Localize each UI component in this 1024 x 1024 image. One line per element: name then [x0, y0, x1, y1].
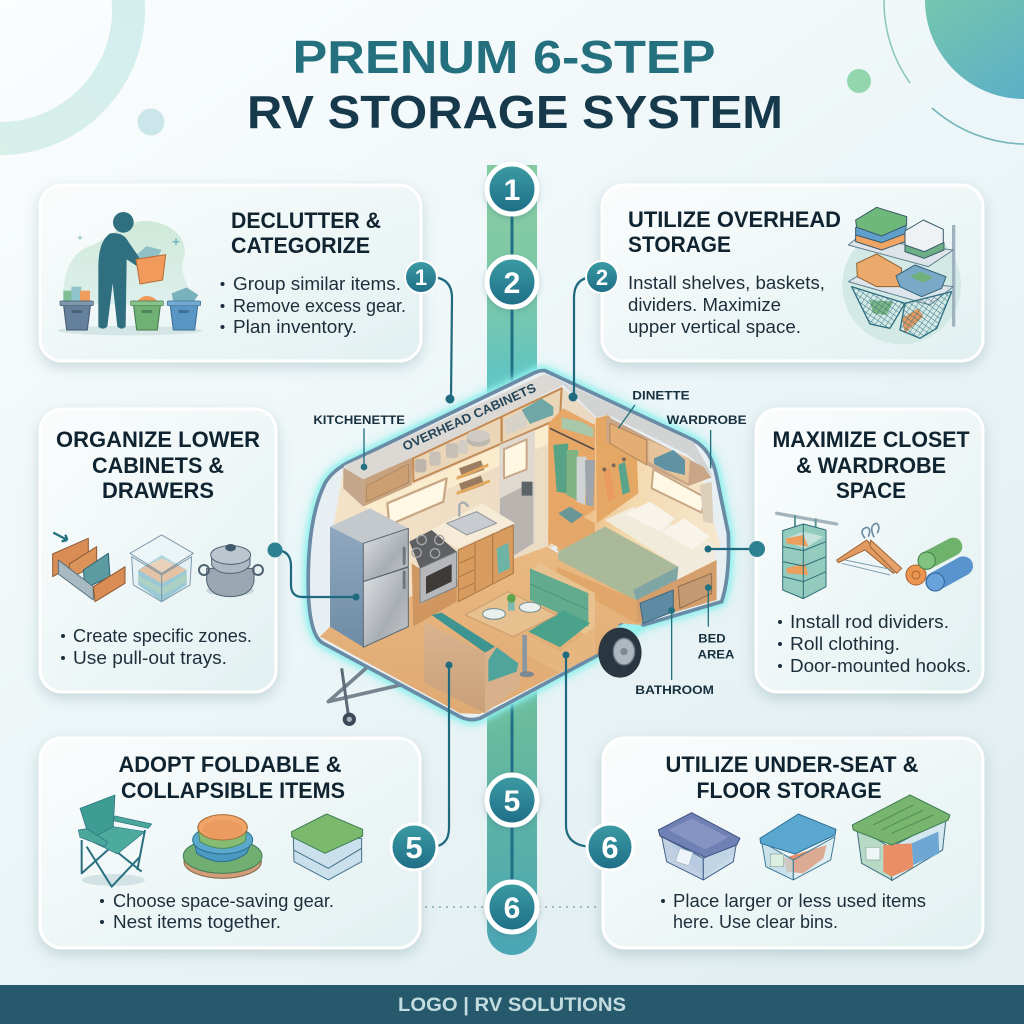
card 1: declutter and categorize	[40, 185, 421, 361]
connector 6 with badge	[562, 652, 633, 870]
back wall bedroom	[557, 417, 721, 600]
label: wardrobe: WARDROBE	[667, 413, 747, 427]
back wall kitchen	[330, 388, 597, 627]
left overhead cabinet	[343, 457, 413, 507]
connector 2 with badge: 2	[596, 265, 608, 290]
label: dinette: DINETTE	[632, 388, 690, 402]
bullet list: Install rod dividers.	[790, 611, 949, 632]
wardrobe interior	[548, 408, 595, 550]
heading: STORAGE	[628, 232, 731, 257]
bullet list: Nest items together.	[113, 911, 281, 932]
heading: DECLUTTER &	[231, 208, 381, 233]
timeline badge 5: 5	[504, 785, 520, 818]
bullet list: Roll clothing.	[790, 633, 900, 654]
spice rack	[457, 460, 490, 495]
overhead cabinets label: OVERHEAD CABINETS	[400, 381, 538, 454]
bullet list: here. Use clear bins.	[673, 911, 838, 932]
under-cabinet light	[363, 419, 560, 517]
bedroom window	[652, 469, 713, 523]
heading: CABINETS &	[92, 453, 224, 478]
connector 5 with badge: 5	[405, 830, 423, 865]
bullet list	[100, 890, 334, 932]
icon: drawer with dividers	[53, 533, 125, 602]
heading: UTILIZE UNDER-SEAT &	[666, 752, 919, 777]
timeline badge 1: 1	[504, 174, 520, 207]
bullet list	[661, 890, 926, 932]
trailer shell	[308, 371, 729, 720]
label: kitchenette: KITCHENETTE	[313, 413, 405, 427]
connector 5 with badge	[391, 662, 452, 870]
icon: collapsible container	[292, 814, 363, 880]
icon: rolled clothing	[906, 547, 963, 591]
bullet list	[778, 611, 971, 676]
heading	[231, 208, 381, 258]
kitchen window	[387, 478, 447, 525]
card 5: foldable items	[40, 738, 420, 948]
refrigerator	[330, 508, 408, 647]
card 3: lower cabinets and drawers	[40, 409, 276, 692]
heading	[118, 752, 345, 803]
RV trailer cutaway illustration	[308, 371, 747, 726]
heading: COLLAPSIBLE ITEMS	[121, 778, 345, 803]
label: bathroom: BATHROOM	[635, 683, 714, 697]
body text: dividers. Maximize	[628, 294, 781, 315]
decorative corner: top left ring and dot	[0, 0, 164, 138]
floor	[320, 547, 642, 714]
bullet list	[220, 273, 406, 337]
heading: DRAWERS	[102, 478, 214, 503]
icon: person sorting items into bins	[57, 212, 203, 335]
bullet list: Remove excess gear.	[233, 295, 406, 316]
heading: SPACE	[836, 478, 906, 503]
heading: CATEGORIZE	[231, 233, 370, 258]
central vertical timeline	[425, 165, 600, 955]
trailer hitch	[328, 663, 415, 726]
heading: & WARDROBE	[796, 453, 946, 478]
connector 2 with badge	[568, 261, 618, 402]
heading: MAXIMIZE CLOSET	[772, 427, 970, 452]
label: bed area	[698, 584, 734, 661]
overhead shelves with canisters, plates and towels	[413, 388, 562, 482]
label: bed area: BED	[698, 632, 726, 646]
roof band	[343, 374, 713, 481]
timeline badge 6: 6	[504, 892, 520, 925]
right overhead cabinet	[607, 416, 712, 486]
heading: ADOPT FOLDABLE &	[118, 752, 342, 777]
label: bathroom	[635, 607, 714, 697]
bullet list: Use pull-out trays.	[73, 647, 227, 668]
dinette table and benches	[424, 563, 595, 713]
heading	[628, 207, 841, 257]
heading	[772, 427, 970, 503]
entry door	[499, 430, 535, 555]
label: dinette	[618, 388, 690, 428]
connector 1 with badge: 1	[415, 265, 427, 290]
connector 1 with badge	[405, 261, 454, 404]
footer bar: LOGO | RV SOLUTIONS	[398, 995, 626, 1016]
heading: ORGANIZE LOWER	[56, 427, 260, 452]
title: RV STORAGE SYSTEM	[247, 86, 783, 138]
icon: clear storage bins	[658, 795, 950, 881]
card 2: overhead storage	[602, 185, 983, 361]
heading: FLOOR STORAGE	[696, 778, 882, 803]
icon: hanging organizer	[777, 513, 837, 599]
trailer glow	[308, 371, 729, 720]
timeline badge 1	[487, 164, 537, 214]
label: kitchenette	[313, 413, 405, 470]
under-bed storage bins	[640, 573, 712, 623]
wheel	[598, 628, 642, 678]
body text	[628, 272, 825, 337]
connector 4	[704, 541, 765, 557]
timeline badge 6	[487, 882, 537, 932]
wall with hooks and towels	[596, 415, 638, 523]
bullet list: Choose space-saving gear.	[113, 890, 334, 911]
card 6: under-seat and floor storage	[603, 738, 983, 948]
timeline badge 2	[487, 257, 537, 307]
timeline badge 5	[487, 775, 537, 825]
body text: Install shelves, baskets,	[628, 272, 825, 293]
footer bar	[0, 985, 1024, 1024]
heading	[666, 752, 919, 803]
bullet list: Place larger or less used items	[673, 890, 926, 911]
icon: cooking pot	[199, 544, 263, 597]
bullet list: Plan inventory.	[233, 316, 357, 337]
card 4: closet and wardrobe	[756, 409, 983, 692]
bullet list	[61, 625, 252, 668]
decorative corner: top right circle, arc and dot	[847, 0, 1024, 144]
heading	[56, 427, 260, 503]
connector 6 with badge: 6	[601, 830, 619, 865]
label: wardrobe	[667, 413, 747, 468]
icon: clear bin with layers	[130, 535, 193, 602]
icon: shelves, baskets and nets	[842, 207, 961, 344]
body text: upper vertical space.	[628, 316, 801, 337]
title: PRENUM 6-STEP	[292, 31, 716, 83]
icon: folding chair	[78, 795, 152, 887]
label: bed area: AREA	[698, 647, 734, 661]
heading: UTILIZE OVERHEAD	[628, 207, 841, 232]
bed with pillows and blanket	[557, 502, 717, 623]
icon: nested plates and bowls	[183, 815, 262, 878]
bullet list: Create specific zones.	[73, 625, 252, 646]
connector 3	[268, 542, 360, 600]
icon: hangers	[837, 523, 902, 575]
bullet list: Door-mounted hooks.	[790, 655, 971, 676]
bullet list: Group similar items.	[233, 273, 401, 294]
title	[247, 31, 783, 138]
kitchen counter, sink and stove	[409, 503, 515, 627]
timeline badge 2: 2	[504, 267, 520, 300]
